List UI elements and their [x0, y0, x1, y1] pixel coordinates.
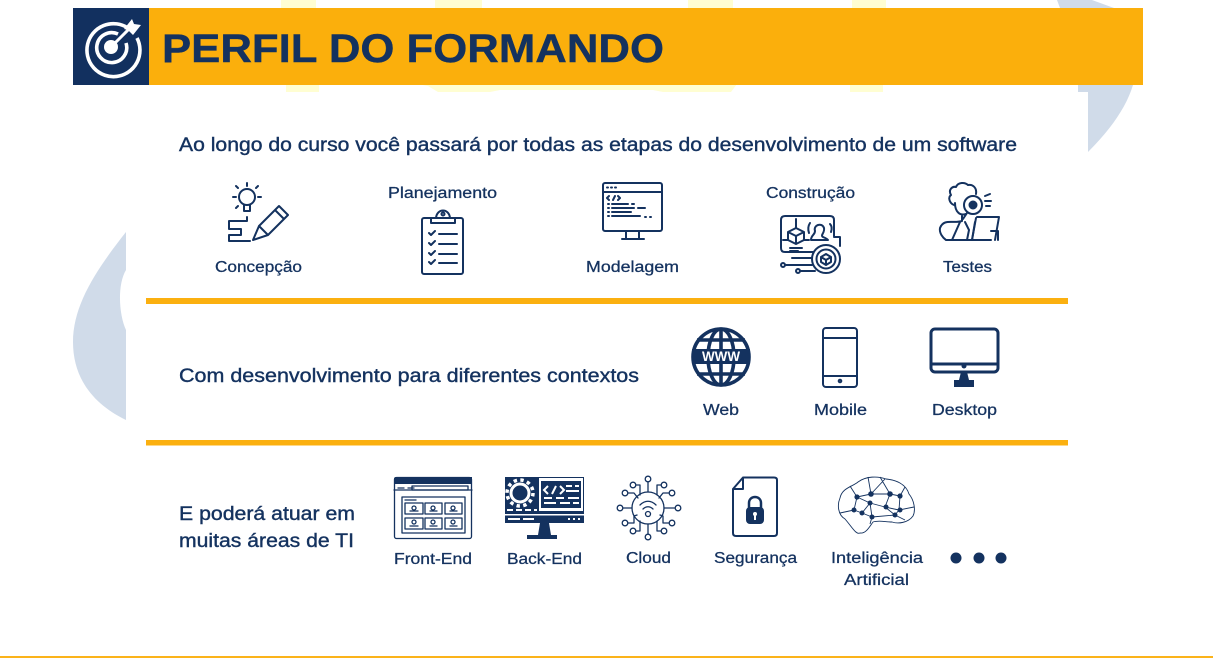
- label: Back-End: [507, 551, 582, 568]
- bottom rule: [0, 656, 1213, 658]
- area: Front-End: [394, 477, 472, 568]
- stage: Testes: [940, 183, 999, 276]
- icon: person with magnifier: [940, 183, 999, 240]
- area: Back-End: [505, 477, 584, 568]
- label: Mobile: [814, 402, 867, 419]
- icon: phone: [823, 328, 857, 387]
- icon: neural brain: [838, 477, 914, 533]
- label: Front-End: [394, 551, 472, 568]
- area: Cloud: [617, 476, 681, 567]
- stage: Modelagem: [586, 183, 679, 276]
- context: Desktop: [931, 329, 998, 419]
- background shape: right crescent: [1057, 0, 1133, 152]
- icon: 3D model screen: [781, 216, 840, 273]
- area: Inteligência Artificial: [831, 477, 923, 589]
- icon: gear and code monitor: [505, 477, 584, 539]
- label: Concepção: [215, 259, 302, 276]
- heading: stages: Ao longo do curso você passará por todas as etapas do desenvolvimento de um software: [179, 134, 1017, 156]
- title banner: [73, 8, 1143, 85]
- title icon box: [73, 8, 149, 85]
- label: Testes: [943, 259, 992, 276]
- ellipsis dots: [950, 552, 1006, 564]
- context: Mobile: [814, 328, 867, 419]
- icon: target with arrow: [87, 19, 141, 77]
- stage: Planejamento: [388, 185, 497, 274]
- label: Cloud: [626, 550, 671, 567]
- icon: clipboard checklist: [422, 210, 463, 274]
- label: Segurança: [714, 550, 797, 567]
- icon: document with padlock: [733, 478, 777, 536]
- icon: bulb and pencil: [229, 183, 288, 241]
- title text: PERFIL DO FORMANDO: [162, 27, 664, 71]
- label: Desktop: [932, 402, 997, 419]
- area: Segurança: [714, 478, 797, 567]
- stage: Concepção: [215, 183, 302, 276]
- label: [831, 550, 923, 589]
- icon: desktop monitor: [931, 329, 998, 387]
- heading: IT areas: E poderá atuar em: [179, 503, 355, 525]
- label: Inteligência: [831, 550, 923, 567]
- heading: contexts: Com desenvolvimento para diferentes contextos: [179, 365, 639, 387]
- label: Modelagem: [586, 259, 679, 276]
- icon: code monitor: [603, 183, 662, 239]
- background shape: left crescent: [73, 232, 126, 420]
- stage: Construção: [766, 185, 855, 273]
- label: Planejamento: [388, 185, 497, 202]
- heading: IT areas: muitas áreas de TI: [179, 530, 354, 552]
- icon: browser window: [394, 477, 472, 538]
- label: Artificial: [844, 572, 909, 589]
- icon: globe www: WWW: [702, 348, 741, 364]
- pale yellow background pieces: [281, 0, 886, 92]
- heading: IT areas: [179, 503, 355, 552]
- context: Web: [692, 329, 750, 419]
- divider: [146, 298, 1068, 304]
- label: Web: [703, 402, 739, 419]
- icon: wifi circuit: [617, 476, 681, 540]
- label: Construção: [766, 185, 855, 202]
- divider: [146, 440, 1068, 446]
